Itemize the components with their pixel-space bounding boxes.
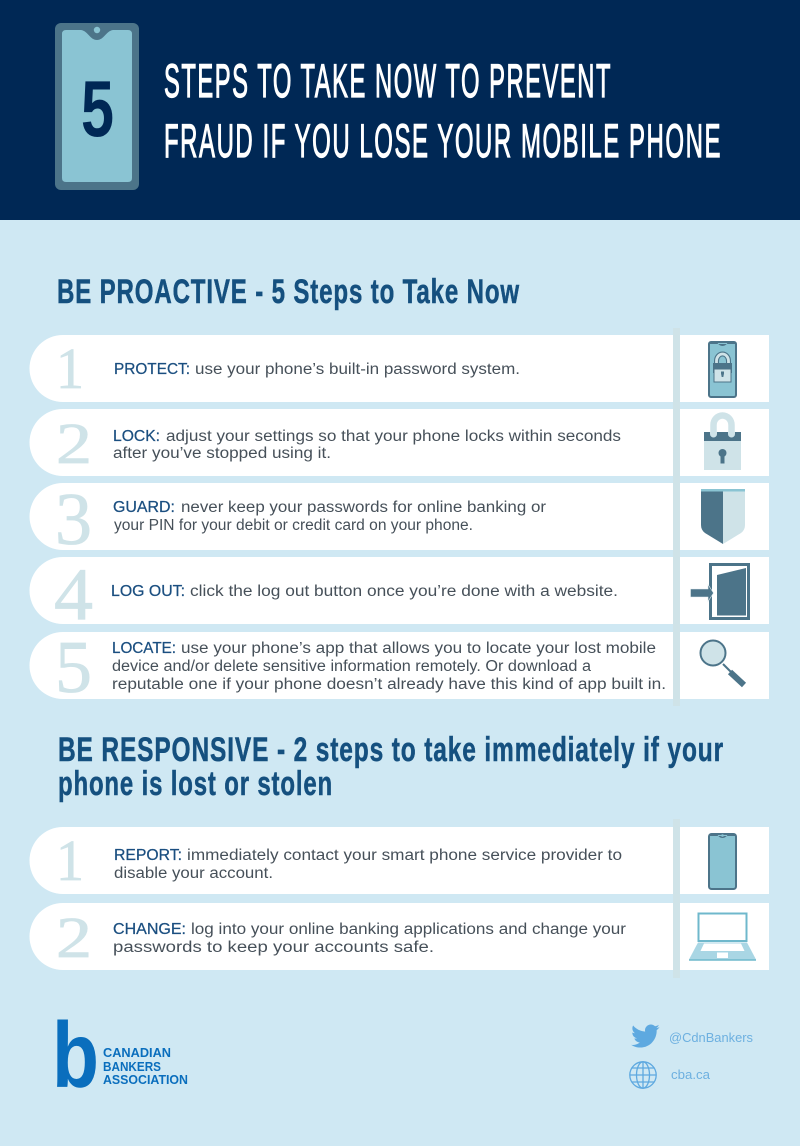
logo: Canadian Bankers Association: ASSOCIATION (103, 1072, 188, 1087)
step 5 locate: 5 (55, 627, 92, 709)
icon: shield (701, 489, 745, 544)
contact: website (630, 1062, 711, 1088)
step 1 report: immediately contact your smart phone service provider to (187, 847, 622, 864)
panel: responsive steps (30, 819, 769, 978)
divider strip (673, 819, 680, 978)
logo: Canadian Bankers Association (52, 1003, 188, 1107)
icon: phone with number 5 (55, 23, 139, 190)
step 5 locate: reputable one if your phone doesn’t already have this kind of app built in. (112, 676, 666, 693)
icon: door with arrow (690, 564, 748, 618)
step 3 guard: 3 (55, 479, 92, 561)
step 3 guard: GUARD: (113, 499, 175, 516)
step 2 lock (30, 409, 769, 476)
step 1 protect (30, 335, 769, 402)
icon: padlock (704, 416, 741, 470)
icon: globe (630, 1062, 656, 1088)
step 1 report: disable your account. (114, 865, 273, 882)
icon: laptop (689, 914, 756, 960)
step 1 report: 1 (56, 828, 84, 893)
contact: twitter (631, 1024, 753, 1048)
step 4 log out: 4 (54, 554, 93, 636)
heading: be responsive: phone is lost or stolen (58, 765, 333, 803)
step 2 lock: 2 (56, 411, 92, 476)
step 4 log out: click the log out button once you’re done with a website. (190, 583, 618, 600)
logo: Canadian Bankers Association: b (52, 1003, 99, 1107)
heading: be proactive: BE PROACTIVE - 5 Steps to Take Now (57, 273, 520, 311)
divider strip (673, 328, 680, 706)
step 2 change: CHANGE: (113, 921, 186, 938)
logo: Canadian Bankers Association: BANKERS (103, 1059, 161, 1074)
step 1 protect: PROTECT: (114, 361, 190, 378)
step 4 log out (30, 554, 769, 636)
step 3 guard: never keep your passwords for online banking or (181, 499, 546, 516)
step 2 change: passwords to keep your accounts safe. (113, 939, 434, 956)
step 2 change: log into your online banking applications and change your (191, 921, 626, 938)
logo: Canadian Bankers Association: CANADIAN (103, 1045, 171, 1060)
step 2 lock: adjust your settings so that your phone locks within seconds (166, 428, 621, 445)
step 1 report: REPORT: (114, 847, 182, 864)
step 5 locate (30, 627, 769, 709)
step 1 report (30, 827, 769, 894)
header banner (0, 0, 800, 220)
step 1 protect: use your phone’s built-in password system. (195, 361, 520, 378)
step 2 lock: LOCK: (113, 428, 160, 445)
step 2 change (30, 903, 769, 970)
step 4 log out: LOG OUT: (111, 583, 185, 600)
step 5 locate: device and/or delete sensitive information remotely. Or download a (112, 658, 591, 675)
contact: twitter: @CdnBankers (669, 1030, 753, 1045)
icon: phone with padlock (709, 342, 736, 397)
step 1 protect: 1 (56, 336, 84, 401)
step 2 change: 2 (56, 905, 92, 970)
title (164, 54, 722, 167)
icon: phone with number 5: 5 (81, 64, 114, 153)
step 5 locate: LOCATE: (112, 640, 176, 657)
icon: magnifying glass (700, 640, 744, 685)
step 5 locate: use your phone’s app that allows you to locate your lost mobile (181, 640, 656, 657)
panel: proactive steps (30, 328, 769, 709)
step 3 guard: your PIN for your debit or credit card on your phone. (114, 517, 473, 534)
contact: website: cba.ca (671, 1067, 711, 1082)
icon: phone (709, 834, 736, 889)
heading: be responsive (58, 731, 724, 803)
step 3 guard (30, 479, 769, 561)
step 2 lock: after you’ve stopped using it. (113, 445, 331, 462)
icon: twitter bird (631, 1024, 660, 1048)
